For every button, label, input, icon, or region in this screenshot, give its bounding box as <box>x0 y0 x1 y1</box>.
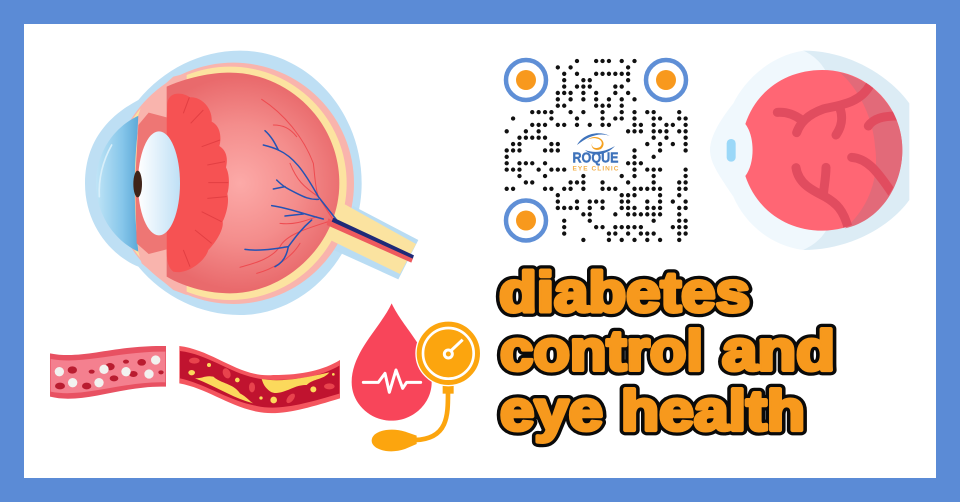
logo name: ROQUE <box>572 150 619 166</box>
red cells <box>55 359 164 389</box>
title line 3 <box>500 379 805 443</box>
pulse line <box>363 370 421 392</box>
plaque <box>188 363 335 403</box>
title line 3: health <box>621 379 805 443</box>
icon: blood drop with pulse and pressure gauge <box>352 303 481 451</box>
retinal vessels <box>777 85 897 228</box>
illustration: healthy blood vessel <box>50 346 166 399</box>
illustration: vessel with plaque <box>179 346 340 413</box>
iris slit <box>727 139 736 162</box>
retina shadow <box>840 73 902 228</box>
title line 3: health <box>621 379 805 443</box>
ciliary iris <box>167 94 229 272</box>
lens <box>138 131 180 235</box>
title line 1: diabetes <box>499 260 750 324</box>
front chamber <box>135 73 187 295</box>
QR code <box>506 60 686 240</box>
choroid yellow <box>113 67 347 300</box>
cornea <box>96 115 140 252</box>
title line 2: and <box>722 319 835 383</box>
optic nerve sheath <box>330 206 418 279</box>
eye halo shaded side <box>803 51 909 250</box>
pupil <box>133 171 142 197</box>
sclera <box>113 63 354 304</box>
white cells <box>55 355 160 387</box>
title line 3: eye <box>500 379 603 443</box>
title line 2 <box>500 319 835 383</box>
logo subtitle: EYE CLINIC <box>572 166 619 172</box>
retinal arteries <box>240 99 333 273</box>
optic nerve vessels <box>327 218 414 263</box>
optic nerve core <box>323 202 416 274</box>
outer halo <box>85 51 362 315</box>
title <box>499 260 835 443</box>
title line 2: and <box>722 319 835 383</box>
QR finder marks <box>506 60 686 240</box>
gauge <box>416 321 481 386</box>
title line 2: control <box>500 319 703 383</box>
QR dots <box>507 61 686 240</box>
title line 2: control <box>500 319 703 383</box>
tube and bulb <box>415 392 448 440</box>
vitreous globe <box>167 73 339 293</box>
illustration: eye with damaged retina <box>710 51 909 250</box>
clinic logo <box>572 133 619 172</box>
eye halo light side <box>710 51 840 250</box>
drop <box>352 303 432 421</box>
retinal veins <box>245 131 337 267</box>
clotted cells <box>189 358 335 405</box>
illustration: eye cross-section <box>85 51 418 315</box>
title line 1: diabetes <box>499 260 750 324</box>
retina disc <box>745 70 902 231</box>
title line 3: eye <box>500 379 603 443</box>
